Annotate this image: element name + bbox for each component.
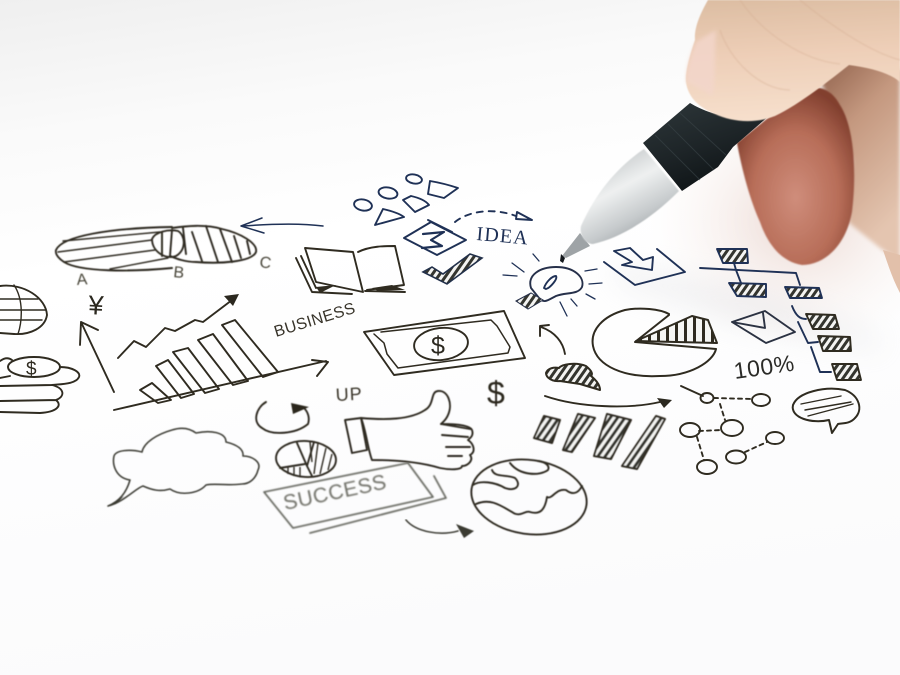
check mark	[423, 254, 482, 284]
speech bubble	[793, 389, 859, 433]
rising bar chart with axes	[80, 294, 328, 410]
hand shadow on paper	[610, 90, 900, 350]
thumbs up	[345, 391, 474, 469]
arrow under lightbulb	[540, 325, 565, 354]
small pie	[275, 439, 337, 479]
100 percent text: 100%	[732, 350, 796, 384]
pen silver barrel	[581, 149, 679, 244]
pie chart	[593, 309, 717, 376]
label C: C	[258, 254, 272, 273]
yen symbol: ¥	[87, 290, 105, 321]
pen tip	[562, 233, 590, 258]
check card	[404, 220, 466, 255]
finger under pen	[737, 87, 854, 265]
banknote: $	[431, 332, 445, 360]
people icons	[353, 173, 458, 225]
left globe	[0, 285, 47, 334]
UP text: UP	[335, 384, 363, 405]
right hand rear palm	[820, 60, 900, 293]
label A: A	[76, 271, 88, 289]
hatched bars	[534, 414, 665, 469]
curved arrow bottom	[406, 520, 474, 538]
network nodes	[680, 386, 784, 474]
banknote	[364, 311, 525, 375]
coin stack: $	[26, 359, 37, 380]
thumb	[686, 0, 900, 121]
pen	[560, 103, 770, 263]
doodle: overlapping ellipses A B C	[56, 226, 272, 289]
coin stack	[0, 357, 79, 413]
thought cloud	[108, 428, 259, 506]
envelope	[732, 311, 795, 343]
IDEA text: IDEA	[476, 223, 530, 250]
pen rubber grip	[643, 103, 770, 191]
long arrow to the right	[545, 396, 672, 408]
light bulb	[503, 254, 602, 316]
dollar sign: $	[487, 375, 505, 411]
arrow pointing left	[241, 218, 323, 233]
SUCCESS sign	[264, 463, 446, 533]
SUCCESS sign: SUCCESS	[281, 471, 389, 515]
inbox arrow card	[604, 248, 685, 285]
book	[296, 246, 405, 294]
world globe	[466, 452, 592, 542]
dashed arrow	[455, 211, 532, 222]
BUSINESS text: BUSINESS	[272, 300, 358, 341]
org chart	[700, 249, 861, 380]
label B: B	[173, 264, 185, 282]
small cloud striped	[546, 364, 600, 390]
circular arrow	[256, 402, 309, 433]
